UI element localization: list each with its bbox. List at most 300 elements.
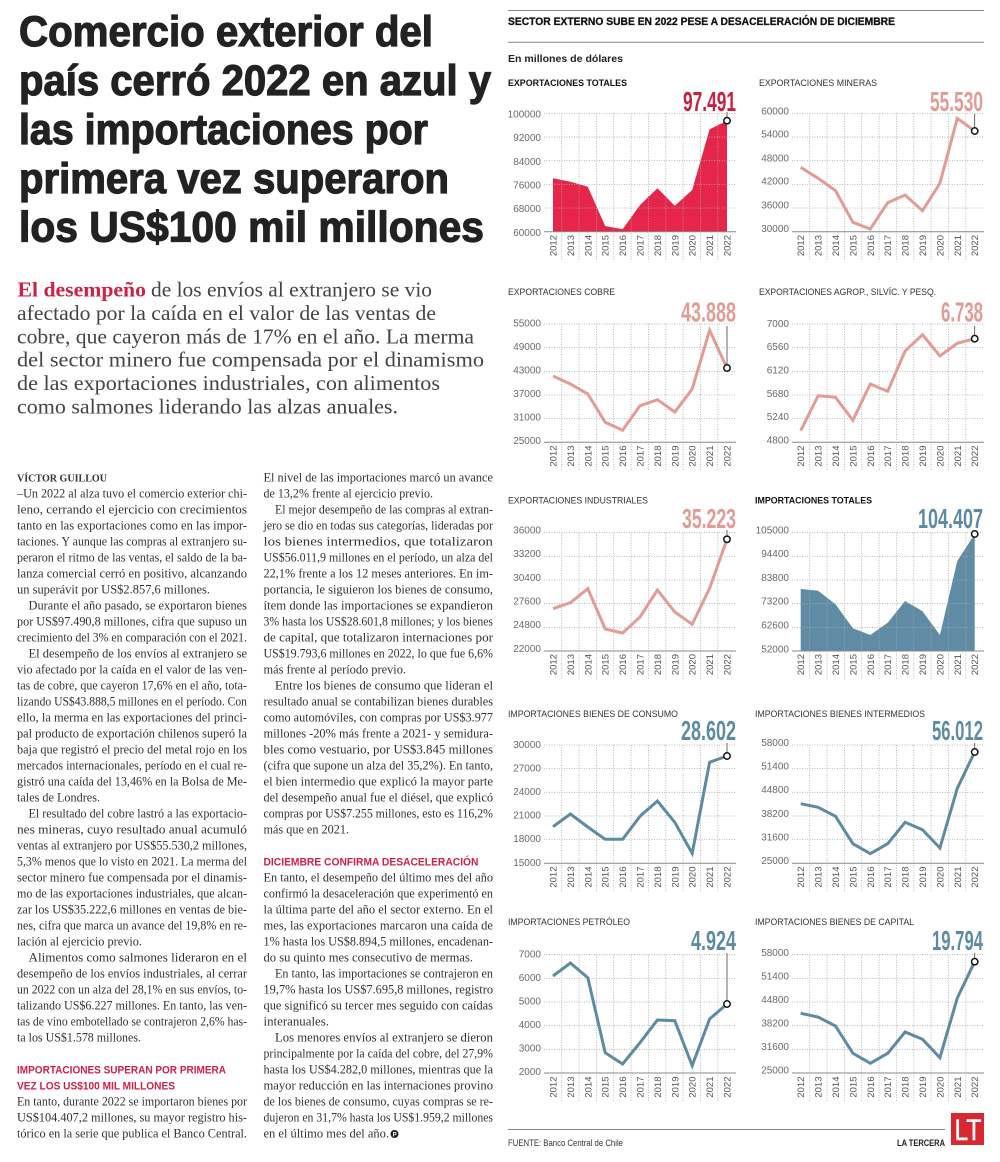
article column 1: pal producto de exportación chilenos superó la [17, 726, 247, 741]
chart: importaciones bienes de capital: 58000 [761, 948, 789, 959]
chart: exportaciones industriales: 2016 [618, 654, 629, 675]
article column 2: jero se dio en todas sus categorías, lideradas por [263, 518, 494, 533]
article column 2: El mejor desempeño de las compras al extran- [275, 502, 493, 517]
icon: end mark [390, 1130, 398, 1138]
footer source: LA TERCERA [897, 1138, 945, 1148]
article column 1: gistró una caída del 13,46% en la Bolsa de Me- [17, 774, 247, 789]
chart: exportaciones industriales: 2013 [566, 654, 577, 675]
chart: importaciones bienes de capital: 2015 [848, 1076, 859, 1098]
chart: exportaciones agropecuarias: 6120 [767, 366, 789, 376]
article column 1: ello, la merma en las exportaciones del princi- [17, 710, 247, 725]
chart: importaciones bienes de capital: 44800 [761, 995, 789, 1006]
article column 1: Alimentos como salmones lideraron en el [28, 950, 247, 965]
chart: importaciones totales: 62600 [761, 620, 789, 631]
article column 1: talizando US$6.227 millones. En tanto, las ven- [17, 998, 247, 1013]
chart: importaciones totales: 94400 [761, 549, 789, 560]
article column 2: do su quinto mes consecutivo de mermas. [264, 950, 473, 965]
chart: exportaciones agropecuarias: 4800 [767, 436, 789, 446]
chart: exportaciones industriales: 2015 [601, 654, 612, 675]
article column 1: US$104.407,2 millones, su mayor registro his- [17, 1110, 247, 1125]
subheading: importaciones: VEZ LOS US$100 MIL MILLONES [17, 1080, 175, 1092]
chart: exportaciones agropecuarias: 5240 [767, 412, 789, 423]
article column 1: vio afectado por la caída en el valor de las ven- [17, 662, 247, 677]
chart: exportaciones agropecuarias: 7000 [767, 319, 789, 330]
chart: exportaciones totales: EXPORTACIONES TOTALES [508, 78, 627, 89]
article column 1 [16, 473, 248, 1141]
chart: exportaciones cobre: 2020 [688, 446, 699, 467]
chart: importaciones bienes de capital: 25000 [761, 1066, 789, 1076]
chart: exportaciones totales: 2012 [548, 235, 560, 256]
subheading: importaciones [17, 1064, 226, 1092]
chart: importaciones totales: 2013 [814, 654, 825, 675]
chart: importaciones bienes intermedios: 2017 [883, 866, 894, 888]
chart: importaciones bienes de consumo: 21000 [513, 811, 541, 822]
chart: exportaciones agropecuarias: 5680 [767, 389, 789, 400]
chart: importaciones bienes de capital: 2021 [953, 1076, 964, 1098]
article column 2: el bien intermedio que explicó la mayor parte [264, 774, 493, 789]
chart: importaciones bienes de consumo: 28.602 [681, 715, 736, 746]
chart: importaciones bienes de consumo: 2015 [601, 866, 612, 888]
article column 2: los bienes intermedios, que totalizaron [264, 534, 494, 549]
chart: exportaciones industriales: 22000 [513, 644, 541, 655]
chart: exportaciones cobre: 49000 [513, 342, 541, 353]
chart: exportaciones cobre: 55000 [513, 318, 541, 330]
chart: importaciones totales: 83800 [761, 573, 789, 584]
headline [19, 8, 491, 252]
chart: exportaciones totales: 2014 [583, 235, 594, 256]
chart: importaciones bienes de consumo: 2020 [688, 866, 699, 888]
article column 1: zar los US$35.222,6 millones en ventas de bie- [17, 902, 247, 917]
chart: exportaciones industriales: 30400 [513, 573, 541, 584]
chart: exportaciones totales: 2018 [653, 235, 664, 256]
chart: exportaciones industriales: 33200 [513, 549, 541, 560]
chart: exportaciones agropecuarias: 2017 [883, 446, 894, 467]
chart: exportaciones mineras: 2018 [901, 235, 912, 256]
chart: exportaciones mineras: 2015 [848, 235, 859, 256]
chart: exportaciones mineras: 2021 [953, 235, 964, 256]
chart: importaciones bienes intermedios: 2019 [918, 866, 929, 888]
chart: importaciones bienes de consumo [508, 709, 736, 891]
chart: importaciones petroleo: 2022 [722, 1076, 734, 1098]
chart: exportaciones cobre: 2021 [705, 446, 716, 467]
chart: exportaciones totales: 100000 [508, 110, 541, 120]
chart: exportaciones totales: 2017 [636, 235, 646, 256]
article column 2: confirmó la desaceleración que experimentó en [264, 886, 493, 901]
article column 1: nes, cifra que marca un avance del 19,8% en re- [17, 918, 247, 933]
article column 2 [263, 470, 494, 1141]
article column 1: leno, cerrando el ejercicio con crecimientos [17, 502, 247, 517]
article column 2: mes, las exportaciones marcaron una caída de [264, 918, 493, 933]
chart: exportaciones cobre: 37000 [513, 389, 541, 400]
chart: exportaciones cobre: 2015 [601, 446, 612, 467]
chart: importaciones totales: 2018 [901, 654, 912, 675]
chart: importaciones totales: 2012 [796, 654, 807, 675]
chart: importaciones totales: 52000 [761, 644, 789, 656]
chart: importaciones bienes intermedios: 2014 [831, 866, 842, 888]
article column 2: de los bienes de consumo, cuyas compras se re- [264, 1094, 493, 1109]
article column 2: compras por US$7.255 millones, esto es 116,2% [264, 806, 493, 821]
graphic header: SECTOR EXTERNO SUBE EN 2022 PESE A DESACELERACIÓN DE DICIEMBRE [508, 15, 895, 28]
chart: exportaciones industriales: 36000 [513, 526, 541, 536]
chart: exportaciones totales: 97.491 [683, 86, 736, 117]
article column 1: lanza comercial cerró en positivo, alcanzando [17, 566, 247, 581]
chart: exportaciones industriales: 24800 [513, 620, 541, 631]
article column 2: 22,1% frente a los 12 meses anteriores. En im- [264, 566, 493, 581]
headline: país cerró 2022 en azul y [19, 57, 491, 105]
chart: exportaciones mineras: 36000 [761, 200, 789, 211]
chart: importaciones petroleo: 2020 [688, 1076, 699, 1098]
chart: importaciones totales [755, 496, 984, 679]
chart: importaciones bienes intermedios: 2022 [970, 866, 981, 888]
chart: exportaciones mineras: 2012 [796, 235, 807, 256]
chart: importaciones bienes intermedios: 44800 [761, 785, 789, 796]
article column 1: El desempeño de los envíos al extranjero se [28, 646, 247, 661]
chart: importaciones totales: 2022 [970, 654, 981, 675]
chart: importaciones petroleo: 3000 [519, 1044, 541, 1055]
article column 1: En tanto, durante 2022 se importaron bienes por [17, 1094, 248, 1109]
chart: exportaciones mineras: 2016 [866, 235, 877, 256]
lede paragraph: como salmones liderando las alzas anuales. [17, 394, 398, 418]
chart: exportaciones totales: 68000 [513, 204, 541, 215]
chart: importaciones bienes de consumo: 27000 [513, 763, 541, 774]
chart: importaciones petroleo: IMPORTACIONES PETRÓLEO [508, 917, 630, 928]
article column 1: ta los US$1.578 millones. [17, 1030, 141, 1045]
article column 2: que significó su tercer mes seguido con caídas [264, 998, 493, 1013]
chart: importaciones bienes de consumo: 2012 [548, 866, 560, 888]
article column 1: sector minero fue compensada por el dinamis- [17, 870, 247, 885]
article column 2: hasta los US$4.282,0 millones, mientras que la [264, 1062, 493, 1077]
chart: importaciones bienes de capital: 51400 [761, 972, 789, 982]
article column 1: peraron el ritmo de las ventas, el saldo de la ba- [17, 550, 247, 565]
chart: exportaciones mineras: 2014 [831, 235, 842, 256]
chart: importaciones bienes de consumo: 2014 [583, 866, 594, 888]
article column 2: interanuales. [264, 1014, 329, 1029]
chart: importaciones bienes de capital: 2016 [866, 1076, 877, 1098]
chart: importaciones petroleo: 2021 [705, 1076, 716, 1098]
chart: exportaciones totales: 92000 [513, 133, 541, 144]
chart: exportaciones industriales: 2012 [548, 654, 560, 675]
logo: LT: LT [954, 1114, 982, 1147]
chart: exportaciones totales: 60000 [513, 228, 541, 239]
subheading: importaciones: IMPORTACIONES SUPERAN POR PRIMERA [17, 1064, 226, 1076]
chart: importaciones bienes de capital: 2012 [796, 1076, 807, 1098]
chart: importaciones bienes de capital: 2020 [935, 1076, 946, 1098]
chart: exportaciones cobre: 31000 [513, 413, 541, 424]
chart: importaciones bienes de consumo: 2018 [653, 866, 664, 888]
article column 1: mo de las exportaciones industriales, que alcan- [17, 886, 247, 901]
article column 2: como automóviles, con compras por US$3.977 [264, 710, 493, 725]
chart: importaciones totales: 2017 [883, 654, 894, 675]
chart: importaciones bienes de consumo: 24000 [513, 787, 541, 798]
chart: importaciones bienes intermedios: IMPORTACIONES BIENES INTERMEDIOS [755, 709, 925, 720]
chart: importaciones bienes de capital: 2019 [918, 1076, 929, 1098]
article column 1: nes mineras, cuyo resultado anual acumuló [17, 822, 247, 837]
chart: exportaciones mineras: 60000 [761, 106, 789, 117]
chart: exportaciones mineras: 2019 [918, 235, 929, 256]
chart: exportaciones totales: 76000 [513, 180, 541, 192]
chart: exportaciones cobre [508, 287, 736, 470]
article column 2: principalmente por la caída del cobre, del 27,9% [264, 1046, 493, 1061]
article column 1: 5,3% menos que lo visto en 2021. La merma del [17, 854, 247, 869]
chart: exportaciones agropecuarias: 2018 [901, 446, 912, 467]
chart: exportaciones totales: 2022 [722, 235, 734, 256]
article column 2: Entre los bienes de consumo que lideran el [275, 678, 493, 693]
chart: exportaciones cobre: 2018 [653, 446, 664, 467]
chart: importaciones bienes de consumo: 2013 [566, 866, 577, 888]
chart: exportaciones agropecuarias [759, 287, 984, 470]
chart: exportaciones industriales: 2014 [583, 654, 594, 675]
chart: importaciones totales: 105000 [756, 526, 789, 536]
article column 1: desempeño de los envíos industriales, al cerrar [17, 966, 248, 981]
lede paragraph [17, 278, 484, 418]
chart: importaciones totales: 2016 [866, 654, 877, 675]
chart: importaciones bienes de capital: 2022 [970, 1076, 981, 1098]
chart: exportaciones totales: 2020 [688, 235, 699, 256]
article column 1: El resultado del cobre lastró a las exportacio- [28, 806, 247, 821]
chart: exportaciones cobre: 25000 [513, 436, 541, 447]
chart: importaciones totales: 73200 [761, 597, 789, 608]
article column 1: tas de cobre, que cayeron 17,6% en el año, tota- [17, 678, 247, 693]
chart: importaciones petroleo: 7000 [519, 950, 541, 960]
article column 2: (cifra que supone un alza del 35,2%). En tanto, [264, 758, 493, 773]
chart: importaciones bienes de capital [755, 917, 984, 1101]
headline: Comercio exterior del [19, 8, 433, 56]
footer source: FUENTE: Banco Central de Chile [508, 1138, 623, 1149]
chart: importaciones petroleo: 2019 [670, 1076, 681, 1098]
chart: importaciones bienes de capital: 31600 [761, 1042, 789, 1053]
chart: importaciones bienes de capital: 2014 [831, 1076, 842, 1098]
article column 2: 3% hasta los US$28.601,8 millones; y los bienes [264, 614, 493, 629]
chart: exportaciones mineras: EXPORTACIONES MINERAS [759, 78, 877, 89]
article column 1: por US$97.490,8 millones, cifra que supuso un [17, 614, 247, 629]
chart: exportaciones mineras: 2017 [883, 235, 894, 256]
chart: exportaciones totales: 2015 [601, 235, 612, 256]
chart: exportaciones industriales: 2018 [653, 654, 664, 675]
chart: importaciones totales: 2020 [935, 654, 946, 675]
chart: exportaciones agropecuarias: 2013 [814, 446, 825, 467]
chart: importaciones petroleo: 5000 [519, 997, 541, 1008]
article column 2: 19,7% hasta los US$7.695,8 millones, registro [264, 982, 493, 997]
article column 1: tanto en las exportaciones como en las impor- [17, 518, 247, 533]
chart: importaciones bienes intermedios [755, 709, 984, 891]
article column 2: más frente al período previo. [264, 662, 406, 677]
chart: importaciones petroleo: 2015 [601, 1076, 612, 1098]
chart: importaciones totales: 2014 [831, 654, 842, 675]
chart: importaciones bienes de capital: 2018 [901, 1076, 912, 1098]
chart: importaciones petroleo: 2012 [548, 1076, 560, 1098]
chart: exportaciones cobre: 2012 [548, 446, 560, 467]
chart: exportaciones cobre: 2022 [722, 446, 734, 467]
article column 2: la última parte del año el sector externo. En el [264, 902, 493, 917]
article column 2: ítem donde las importaciones se expandieron [264, 598, 493, 613]
chart: importaciones bienes intermedios: 2021 [953, 866, 964, 888]
article column 2: En tanto, las importaciones se contrajeron en [275, 966, 493, 981]
article column 1: tórico en la serie que publica el Banco Central. [17, 1126, 247, 1141]
chart: exportaciones industriales: 2017 [636, 654, 646, 675]
article column 2: más que en 2021. [264, 822, 349, 837]
article column 1: lación al ejercicio previo. [17, 934, 142, 949]
chart: importaciones bienes de capital: 2013 [814, 1076, 825, 1098]
chart: importaciones bienes intermedios: 2020 [935, 866, 946, 888]
chart: importaciones bienes intermedios: 2013 [814, 866, 825, 888]
article column 1: crecimiento del 3% en comparación con el 2021. [17, 630, 247, 645]
chart: exportaciones totales: 2016 [618, 235, 629, 256]
chart: exportaciones industriales: 2022 [722, 654, 734, 675]
article column 2: US$19.793,6 millones en 2022, lo que fue 6,6% [264, 646, 493, 661]
chart: exportaciones cobre: EXPORTACIONES COBRE [508, 287, 615, 298]
chart: importaciones bienes de capital: 2017 [883, 1076, 894, 1098]
chart: importaciones bienes de consumo: 2021 [705, 866, 716, 888]
chart: importaciones totales: 2021 [953, 654, 964, 675]
chart: importaciones bienes de consumo: IMPORTACIONES BIENES DE CONSUMO [508, 709, 678, 720]
chart: importaciones totales: 2015 [848, 654, 859, 675]
chart: exportaciones mineras: 2020 [935, 235, 946, 256]
byline: VÍCTOR GUILLOU [17, 473, 107, 485]
chart: exportaciones industriales: 2020 [688, 654, 699, 675]
chart: exportaciones agropecuarias: 2015 [848, 446, 859, 467]
chart: exportaciones agropecuarias: EXPORTACIONES AGROP., SILVÍC. Y PESQ. [759, 287, 936, 298]
chart: exportaciones agropecuarias: 2012 [796, 446, 807, 467]
chart: importaciones bienes de consumo: 2022 [722, 866, 734, 888]
graphic header: En millones de dólares [508, 53, 623, 65]
chart: importaciones petroleo: 6000 [519, 973, 541, 984]
headline: las importaciones por [19, 106, 428, 154]
chart: exportaciones mineras: 2022 [970, 235, 981, 256]
chart: exportaciones mineras [759, 78, 984, 259]
lede paragraph: afectado por la caída en el valor de las ventas de [17, 301, 436, 325]
chart: exportaciones agropecuarias: 2014 [831, 446, 842, 467]
chart: importaciones petroleo: 2018 [653, 1076, 664, 1098]
chart: exportaciones agropecuarias: 2019 [918, 446, 929, 467]
article column 2: de capital, que totalizaron internaciones por [264, 630, 494, 645]
article column 2: mayor reducción en las internaciones provino [264, 1078, 493, 1093]
chart: importaciones bienes de consumo: 2019 [670, 866, 681, 888]
article column 2: portancia, le siguieron los bienes de consumo, [264, 582, 493, 597]
chart: importaciones totales: 2019 [918, 654, 929, 675]
chart: exportaciones cobre: 2017 [636, 446, 646, 467]
chart: exportaciones agropecuarias: 2022 [970, 446, 981, 467]
chart: importaciones petroleo: 2013 [566, 1076, 577, 1098]
article column 2: El nivel de las importaciones marcó un avance [264, 470, 493, 485]
article column 2: del desempeño anual fue el diésel, que explicó [264, 790, 493, 805]
article column 2: 1% hasta los US$8.894,5 millones, encadenan- [264, 934, 493, 949]
article column 1: un superávit por US$2.857,6 millones. [17, 582, 210, 597]
article column 2: dujeron en 31,7% hasta los US$1.959,2 millones [264, 1110, 493, 1125]
chart: importaciones bienes intermedios: 2015 [848, 866, 859, 888]
article column 1: –Un 2022 al alza tuvo el comercio exterior chi- [16, 486, 247, 501]
chart: exportaciones industriales: 2019 [670, 654, 681, 675]
chart: importaciones bienes intermedios: 38200 [761, 809, 789, 820]
chart: importaciones petroleo: 2014 [583, 1076, 594, 1098]
article column 2: en el último mes del año. [264, 1126, 389, 1141]
chart: importaciones bienes intermedios: 58000 [761, 738, 789, 749]
article column 2: bles como vestuario, por US$3.845 millones [264, 742, 493, 757]
chart: importaciones bienes intermedios: 2012 [796, 866, 807, 888]
article column 1: tas de vino embotellado se contrajeron 2,6% has- [17, 1014, 247, 1029]
chart: exportaciones mineras: 54000 [761, 130, 789, 141]
article column 1: ventas al extranjero por US$55.530,2 millones, [17, 838, 247, 853]
chart: importaciones petroleo [508, 917, 736, 1101]
chart: exportaciones totales: 2019 [670, 235, 681, 256]
chart: exportaciones mineras: 42000 [761, 177, 789, 188]
article column 1: mercados internacionales, período en el cual re- [17, 758, 247, 773]
lede paragraph: El desempeño [18, 278, 146, 302]
chart: exportaciones cobre: 2019 [670, 446, 681, 467]
chart: importaciones bienes intermedios: 51400 [761, 762, 789, 772]
chart: exportaciones totales [508, 78, 736, 259]
chart: importaciones bienes intermedios: 2018 [901, 866, 912, 888]
article column 1: un 2022 con un alza del 28,1% en sus envíos, to- [17, 982, 247, 997]
chart: exportaciones cobre: 43000 [513, 366, 541, 376]
chart: exportaciones industriales: 35.223 [682, 503, 736, 534]
chart: importaciones petroleo: 2017 [636, 1076, 646, 1098]
chart: importaciones bienes de consumo: 15000 [513, 858, 541, 869]
chart: exportaciones totales: 2013 [566, 235, 577, 256]
chart: importaciones bienes de consumo: 2017 [636, 866, 646, 888]
chart: exportaciones industriales: 2021 [705, 654, 716, 675]
chart: exportaciones cobre: 2016 [618, 446, 629, 467]
lede paragraph: cobre, que cayeron más de 17% en el año. La merma [17, 324, 475, 348]
lede paragraph: del sector minero fue compensada por el dinamismo [17, 348, 484, 372]
chart: importaciones bienes de capital: 38200 [761, 1019, 789, 1030]
chart: importaciones bienes de consumo: 30000 [513, 740, 541, 751]
chart: exportaciones cobre: 43.888 [681, 297, 736, 328]
lede paragraph: de los envíos al extranjero se vio [151, 278, 432, 302]
article column 2: US$56.011,9 millones en el período, un alza del [264, 550, 493, 565]
chart: importaciones petroleo: 2016 [618, 1076, 629, 1098]
chart: exportaciones totales: 84000 [513, 157, 541, 168]
chart: exportaciones agropecuarias: 6560 [767, 342, 789, 353]
chart: exportaciones mineras: 2013 [814, 235, 825, 256]
chart: exportaciones cobre: 2013 [566, 446, 577, 467]
chart: exportaciones agropecuarias: 2020 [935, 446, 946, 467]
article column 2: de 13,2% frente al ejercicio previo. [264, 486, 433, 501]
headline: primera vez superaron [19, 155, 449, 203]
chart: importaciones bienes de consumo: 18000 [513, 834, 541, 845]
chart: exportaciones totales: 2021 [705, 235, 716, 256]
chart: importaciones bienes de consumo: 2016 [618, 866, 629, 888]
article column 1: Durante el año pasado, se exportaron bienes [28, 598, 247, 613]
chart: importaciones totales: IMPORTACIONES TOTALES [755, 496, 872, 506]
article column 1: taciones. Y aunque las compras al extranjero su- [17, 534, 247, 549]
article column 2: millones -20% más frente a 2021- y semidura- [264, 726, 493, 741]
chart: exportaciones cobre: 2014 [583, 446, 594, 467]
chart: exportaciones agropecuarias: 2016 [866, 446, 877, 467]
chart: exportaciones mineras: 48000 [761, 153, 789, 164]
article column 2: resultado anual se contabilizan bienes durables [264, 694, 493, 709]
chart: exportaciones mineras: 30000 [761, 224, 789, 235]
subheading: diciembre: DICIEMBRE CONFIRMA DESACELERACIÓN [264, 856, 479, 869]
article column 1: tales de Londres. [17, 790, 100, 805]
chart: importaciones bienes de capital: IMPORTACIONES BIENES DE CAPITAL [755, 917, 914, 928]
article column 2: Los menores envíos al extranjero se dieron [275, 1030, 493, 1045]
chart: importaciones bienes intermedios: 31600 [761, 833, 789, 844]
headline: los US$100 mil millones [19, 204, 484, 252]
chart: importaciones petroleo: 4.924 [691, 925, 736, 956]
chart: importaciones bienes intermedios: 25000 [761, 856, 789, 867]
icon: end mark: P [393, 1132, 397, 1138]
chart: exportaciones industriales: 27600 [513, 596, 541, 608]
graphic header [508, 10, 984, 65]
footer source [508, 1130, 945, 1149]
chart: exportaciones industriales: EXPORTACIONES INDUSTRIALES [508, 496, 648, 506]
article column 2: En tanto, el desempeño del último mes del año [264, 870, 493, 885]
chart: importaciones bienes intermedios: 2016 [866, 866, 877, 888]
chart: exportaciones industriales [508, 496, 736, 679]
chart: importaciones petroleo: 4000 [519, 1020, 541, 1031]
article column 1: lizando US$43.888,5 millones en el período. Con [17, 694, 247, 709]
chart: exportaciones agropecuarias: 2021 [953, 446, 964, 467]
